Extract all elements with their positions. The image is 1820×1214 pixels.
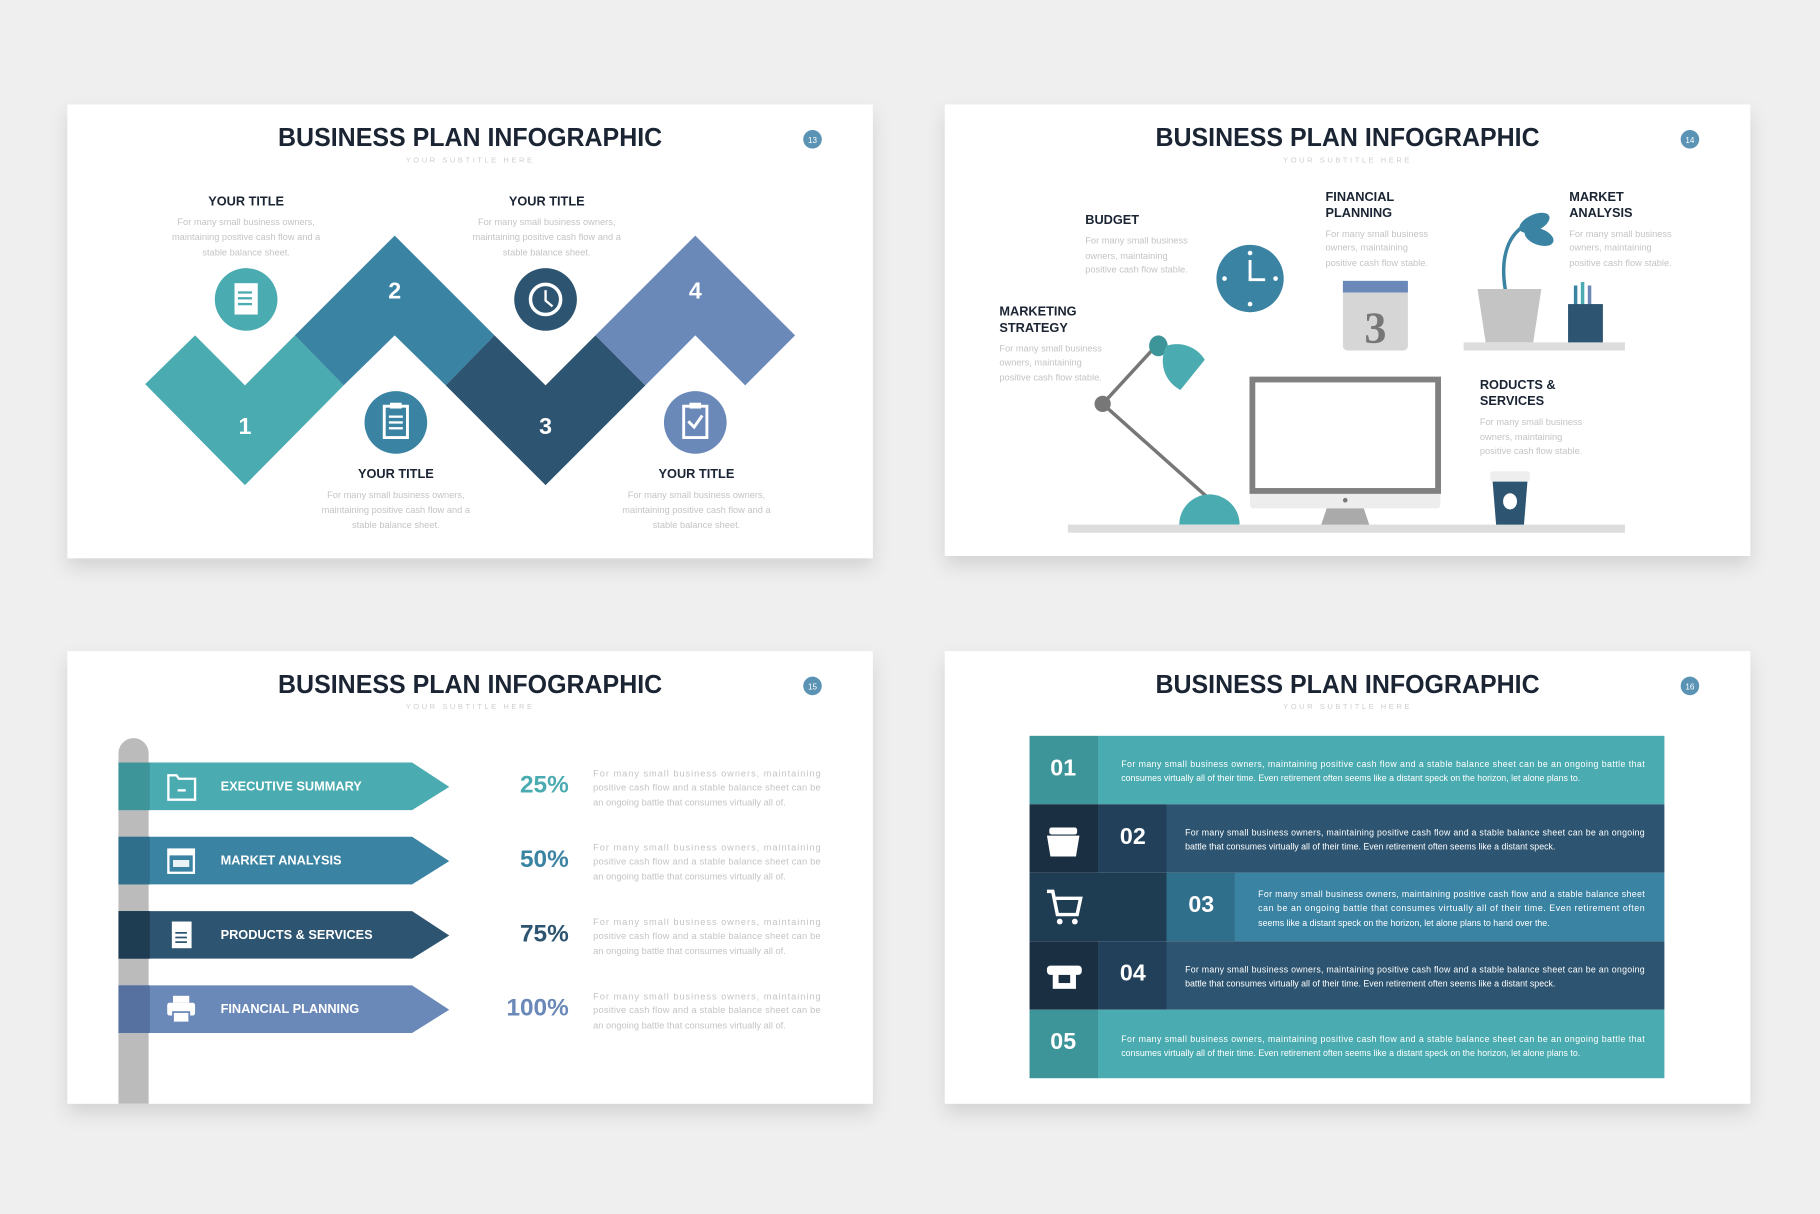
text: step 4: For many small business owners, bbox=[628, 490, 765, 500]
row 04: 04 bbox=[1120, 960, 1146, 986]
panel: zigzag steps bbox=[67, 104, 873, 558]
text: financial planning: owners, maintaining bbox=[1325, 243, 1408, 253]
pole bbox=[118, 738, 149, 1104]
text: step 2 bbox=[322, 466, 471, 530]
icon: notepad bbox=[215, 268, 277, 331]
text: market analysis: MARKET bbox=[1569, 189, 1624, 204]
heading: BUSINESS PLAN INFOGRAPHIC bbox=[278, 671, 662, 699]
text: step 2: For many small business owners, bbox=[327, 490, 465, 500]
percentages: 50% bbox=[520, 846, 569, 873]
text: market analysis: owners, maintaining bbox=[1569, 243, 1652, 253]
text: financial planning: PLANNING bbox=[1325, 205, 1392, 220]
descriptions: For many small business owners, maintaining bbox=[593, 917, 821, 927]
text: step 1: For many small business owners, bbox=[177, 217, 315, 227]
row 02: For many small business owners, maintaining positive cash flow and a stable balance sheet can be an ongoing bbox=[1185, 828, 1645, 838]
text: step 4: stable balance sheet. bbox=[653, 520, 740, 530]
row 01: 01 bbox=[1050, 754, 1076, 780]
text: budget bbox=[1085, 212, 1188, 275]
text: step 3: stable balance sheet. bbox=[503, 247, 591, 257]
heading bbox=[1155, 671, 1540, 711]
icon: monitor bbox=[1250, 377, 1440, 526]
text: market analysis: positive cash flow stable. bbox=[1569, 258, 1672, 268]
row 03 bbox=[1030, 873, 1664, 941]
page badge 13 bbox=[803, 130, 822, 149]
heading: YOUR SUBTITLE HERE bbox=[1283, 155, 1412, 164]
page badge 14: 14 bbox=[1685, 136, 1695, 145]
row 03: 03 bbox=[1188, 891, 1214, 917]
percentages bbox=[506, 772, 569, 1022]
row 05 bbox=[1030, 1010, 1664, 1078]
row 05: consumes virtually all of their time. Even retirement often seems like a distant speck on the horizon, let alone plans to. bbox=[1121, 1048, 1580, 1058]
zigzag chart: 1 bbox=[239, 413, 252, 439]
descriptions: For many small business owners, maintaining bbox=[593, 991, 821, 1001]
row 01: For many small business owners, maintaining positive cash flow and a stable balance sheet can be an ongoing battle that bbox=[1121, 759, 1645, 769]
descriptions: For many small business owners, maintaining bbox=[593, 843, 821, 853]
text: step 1: maintaining positive cash flow and a bbox=[172, 232, 321, 242]
heading: YOUR SUBTITLE HERE bbox=[1283, 702, 1412, 711]
heading: BUSINESS PLAN INFOGRAPHIC bbox=[1155, 671, 1540, 699]
heading: YOUR SUBTITLE HERE bbox=[406, 702, 535, 711]
text: marketing strategy: For many small business bbox=[999, 344, 1102, 354]
percentages: 75% bbox=[520, 920, 569, 947]
panel: desk illustration bbox=[945, 104, 1750, 556]
row 02: 02 bbox=[1120, 823, 1146, 849]
descriptions: an ongoing battle that consumes virtually all of. bbox=[593, 946, 786, 956]
text: step 3: For many small business owners, bbox=[478, 217, 615, 227]
text: market analysis bbox=[1569, 189, 1672, 268]
descriptions: an ongoing battle that consumes virtually all of. bbox=[593, 797, 786, 807]
text: products & services: positive cash flow stable. bbox=[1480, 446, 1582, 456]
text: market analysis: For many small business bbox=[1569, 229, 1672, 239]
text: step 4: maintaining positive cash flow and a bbox=[622, 505, 771, 515]
panel: arrow list bbox=[67, 651, 873, 1104]
text: products & services: For many small business bbox=[1480, 417, 1583, 427]
icon: desk lamp bbox=[1095, 335, 1240, 525]
row 01 bbox=[1030, 736, 1664, 804]
arrow: financial planning bbox=[118, 985, 449, 1033]
descriptions: For many small business owners, maintaining bbox=[593, 768, 821, 778]
text: financial planning: FINANCIAL bbox=[1325, 189, 1394, 204]
heading bbox=[1155, 124, 1540, 164]
text: step 2: maintaining positive cash flow and a bbox=[322, 505, 471, 515]
row 05: 05 bbox=[1050, 1028, 1076, 1054]
text: budget: BUDGET bbox=[1085, 212, 1139, 227]
text: products & services bbox=[1480, 377, 1583, 456]
text: financial planning bbox=[1325, 189, 1428, 268]
page badge 15: 15 bbox=[808, 682, 818, 691]
text: step 1: stable balance sheet. bbox=[202, 247, 290, 257]
arrow: market analysis bbox=[118, 837, 449, 884]
heading: YOUR SUBTITLE HERE bbox=[406, 155, 535, 164]
page badge 16: 16 bbox=[1685, 682, 1695, 691]
text: step 1 bbox=[172, 193, 321, 257]
text: financial planning: For many small business bbox=[1325, 229, 1428, 239]
arrow: executive summary bbox=[118, 763, 449, 810]
text: step 3: maintaining positive cash flow and a bbox=[473, 232, 622, 242]
text: products & services: RODUCTS & bbox=[1480, 377, 1556, 392]
text: marketing strategy: positive cash flow stable. bbox=[999, 373, 1102, 383]
arrow: products & services: PRODUCTS & SERVICES bbox=[221, 927, 373, 942]
text: budget: positive cash flow stable. bbox=[1085, 265, 1188, 275]
descriptions: positive cash flow and a stable balance sheet can be bbox=[593, 1005, 821, 1015]
text: products & services: owners, maintaining bbox=[1480, 432, 1562, 442]
descriptions: positive cash flow and a stable balance sheet can be bbox=[593, 857, 821, 867]
text: step 4 bbox=[622, 466, 771, 530]
row 02 bbox=[1030, 804, 1664, 873]
text: market analysis: ANALYSIS bbox=[1569, 205, 1633, 220]
text: step 3 bbox=[473, 193, 622, 257]
page badge 14 bbox=[1681, 130, 1699, 149]
percentages: 25% bbox=[520, 772, 569, 799]
icon: calendar bbox=[1343, 281, 1408, 352]
page badge 13: 13 bbox=[808, 136, 818, 145]
heading bbox=[278, 124, 662, 164]
text: step 1: YOUR TITLE bbox=[208, 193, 284, 208]
heading: BUSINESS PLAN INFOGRAPHIC bbox=[278, 124, 662, 152]
text: products & services: SERVICES bbox=[1480, 393, 1544, 408]
row 05: For many small business owners, maintaining positive cash flow and a stable balance sheet can be an ongoing battle that bbox=[1121, 1034, 1645, 1044]
panel: numbered table bbox=[945, 651, 1750, 1104]
zigzag chart bbox=[145, 236, 795, 485]
icon: clipboard list bbox=[365, 391, 427, 454]
arrow: executive summary: EXECUTIVE SUMMARY bbox=[221, 778, 362, 793]
zigzag chart: 3 bbox=[539, 413, 552, 439]
descriptions: an ongoing battle that consumes virtually all of. bbox=[593, 872, 786, 882]
row 03: can be an ongoing battle that consumes virtually all of their time. Even retirement often bbox=[1258, 903, 1645, 913]
descriptions: positive cash flow and a stable balance sheet can be bbox=[593, 931, 821, 941]
text: financial planning: positive cash flow stable. bbox=[1325, 258, 1428, 268]
page badge 15 bbox=[803, 677, 822, 695]
icon: wall clock bbox=[1216, 245, 1284, 312]
descriptions bbox=[593, 768, 821, 1030]
text: marketing strategy: owners, maintaining bbox=[999, 358, 1082, 368]
page badge 16 bbox=[1681, 677, 1699, 695]
heading bbox=[278, 671, 662, 711]
text: budget: owners, maintaining bbox=[1085, 251, 1168, 261]
icon: clipboard check bbox=[664, 391, 727, 454]
text: step 3: YOUR TITLE bbox=[509, 193, 585, 208]
text: step 2: YOUR TITLE bbox=[358, 466, 434, 481]
row 03: seems like a distant speck on the horizon, let alone plans to hand over the. bbox=[1258, 918, 1550, 928]
text: budget: For many small business bbox=[1085, 236, 1188, 246]
icon: clock bbox=[514, 268, 577, 331]
arrow: financial planning: FINANCIAL PLANNING bbox=[221, 1001, 359, 1016]
row 02: battle that consumes virtually all of their time. Even retirement often seems like a distant speck. bbox=[1185, 842, 1555, 852]
text: marketing strategy: STRATEGY bbox=[999, 320, 1068, 335]
row 03: For many small business owners, maintaining positive cash flow and a stable balance sheet bbox=[1258, 889, 1645, 899]
text: step 4: YOUR TITLE bbox=[659, 466, 734, 481]
arrow: market analysis: MARKET ANALYSIS bbox=[221, 853, 342, 868]
zigzag chart: 2 bbox=[388, 277, 401, 303]
icon: calendar: 3 bbox=[1364, 303, 1386, 352]
descriptions: an ongoing battle that consumes virtually all of. bbox=[593, 1020, 786, 1030]
icon: coffee cup bbox=[1490, 471, 1530, 525]
text: step 2: stable balance sheet. bbox=[352, 520, 440, 530]
row 01: consumes virtually all of their time. Even retirement often seems like a distant speck on the horizon, let alone plans to. bbox=[1121, 773, 1580, 783]
arrow: products & services bbox=[118, 911, 449, 959]
text: marketing strategy bbox=[999, 304, 1102, 383]
row 04: battle that consumes virtually all of their time. Even retirement often seems like a distant speck. bbox=[1185, 979, 1555, 989]
desk bbox=[1068, 525, 1625, 533]
heading: BUSINESS PLAN INFOGRAPHIC bbox=[1155, 124, 1540, 152]
row 04 bbox=[1030, 941, 1664, 1010]
icon: plant and pencil cup on shelf bbox=[1464, 209, 1625, 351]
zigzag chart: 4 bbox=[689, 277, 702, 303]
descriptions: positive cash flow and a stable balance sheet can be bbox=[593, 782, 821, 792]
text: marketing strategy: MARKETING bbox=[999, 304, 1077, 319]
row 04: For many small business owners, maintaining positive cash flow and a stable balance sheet can be an ongoing bbox=[1185, 965, 1645, 975]
percentages: 100% bbox=[506, 995, 569, 1022]
